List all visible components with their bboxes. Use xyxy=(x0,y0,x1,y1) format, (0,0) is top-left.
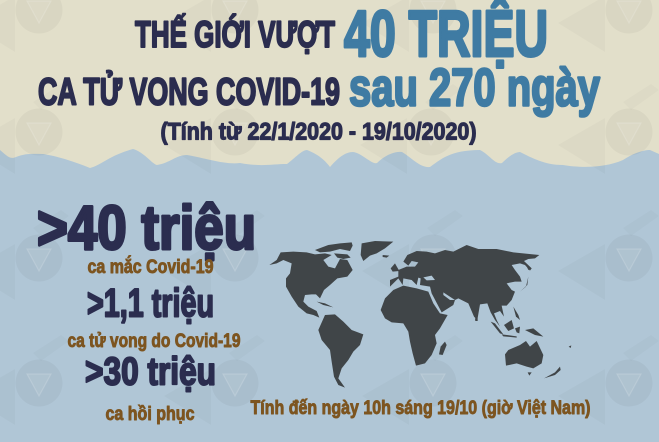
map date caption: Tính đến ngày 10h sáng 19/10 (giờ Việt Nam) xyxy=(250,398,590,419)
stat: deaths label: ca tử vong do Covid-19 xyxy=(68,331,240,352)
stat: deaths number: >1,1 triệu xyxy=(87,282,214,326)
background: blue water with wavy edge xyxy=(0,149,659,442)
title xyxy=(38,0,600,146)
stat: cases label: ca mắc Covid-19 xyxy=(88,256,214,278)
date range subtitle: (Tính từ 22/1/2020 - 19/10/2020) xyxy=(160,118,476,146)
stat: recovered label: ca hồi phục xyxy=(106,404,195,425)
title line 1 dark: THẾ GIỚI VƯỢT xyxy=(135,13,335,55)
stat: recovered number: >30 triệu xyxy=(85,350,216,394)
statistics column xyxy=(37,194,256,425)
stat: cases number: >40 triệu xyxy=(37,194,256,263)
world map xyxy=(269,241,571,388)
title line 2 dark: CA TỬ VONG COVID-19 xyxy=(38,70,340,114)
